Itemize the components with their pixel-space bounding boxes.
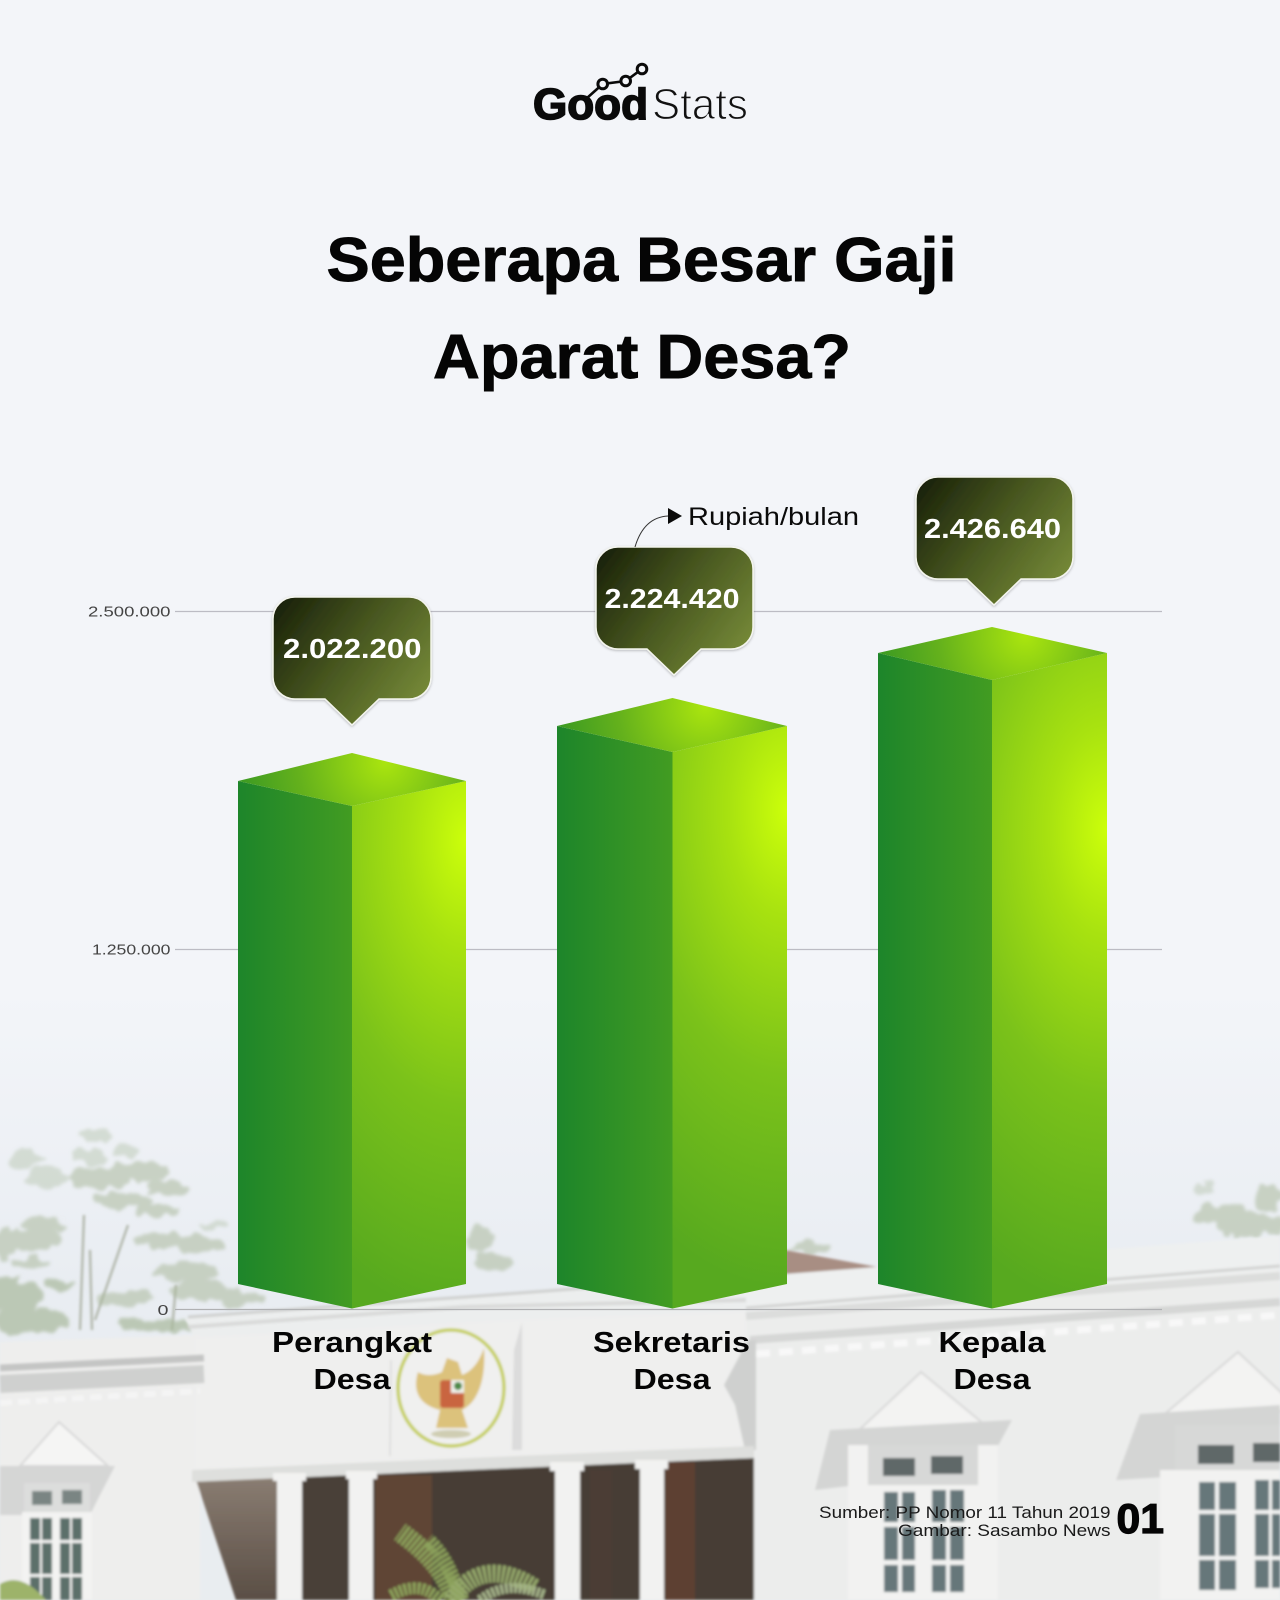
background photo: government building xyxy=(0,1236,1280,1600)
callout: 2.224.420: 2.224.420 xyxy=(604,583,740,614)
bottom-left palm xyxy=(0,1580,46,1600)
columns xyxy=(273,1460,668,1600)
wood panels xyxy=(375,1475,432,1600)
page number: 01 xyxy=(1116,1495,1164,1542)
central roof xyxy=(185,1282,746,1340)
wall seams and shadow xyxy=(512,1322,522,1450)
title: Aparat Desa? xyxy=(433,323,851,392)
source note xyxy=(819,1503,1110,1540)
callout: 2.224.420 xyxy=(596,547,753,675)
category label: Kepala Desa xyxy=(938,1327,1046,1396)
right-centre window xyxy=(857,1372,985,1432)
background photo: trees xyxy=(0,1129,1280,1334)
axis label 0: 0 xyxy=(158,1303,168,1319)
central wall xyxy=(195,1312,746,1470)
category label: Perangkat Desa: Desa xyxy=(314,1364,391,1396)
emblem xyxy=(398,1330,504,1446)
cornice xyxy=(0,1266,1280,1403)
arrow xyxy=(635,508,682,547)
source note: Gambar: Sasambo News xyxy=(898,1521,1110,1540)
portico beam xyxy=(192,1446,754,1482)
left window xyxy=(20,1422,108,1466)
category label: Perangkat Desa xyxy=(272,1327,432,1396)
portico dark xyxy=(196,1458,754,1600)
logo xyxy=(533,64,748,129)
category label: Sekretaris Desa: Sekretaris xyxy=(593,1327,750,1359)
title: Seberapa Besar Gaji xyxy=(326,226,956,295)
callout: 2.022.200: 2.022.200 xyxy=(283,633,422,664)
axis label 1.250.000: 1.250.000 xyxy=(92,942,170,958)
unit note: Rupiah/bulan with arrow xyxy=(635,503,859,547)
logo chart mark xyxy=(587,64,647,98)
background photo: tree trunks xyxy=(80,1215,176,1330)
main roof right xyxy=(640,1236,1280,1320)
category label: Kepala Desa: Kepala xyxy=(938,1327,1046,1359)
callout: 2.022.200 xyxy=(273,597,431,725)
portico left panel xyxy=(196,1476,280,1600)
logo word Stats: Stats xyxy=(652,80,748,129)
callout: 2.426.640: 2.426.640 xyxy=(924,513,1061,544)
category label: Perangkat Desa: Perangkat xyxy=(272,1327,432,1359)
source note: Sumber: PP Nomor 11 Tahun 2019 xyxy=(819,1503,1110,1522)
title xyxy=(326,226,956,392)
chart gridlines and axis xyxy=(88,604,1162,1319)
axis label 2.500.000: 2.500.000 xyxy=(88,604,170,620)
bar: Perangkat Desa xyxy=(238,753,466,1308)
callout: 2.426.640 xyxy=(916,477,1073,605)
right wing wall xyxy=(746,1270,1280,1600)
bar: Sekretaris Desa xyxy=(557,698,787,1308)
category label: Sekretaris Desa: Desa xyxy=(634,1364,711,1396)
category label: Kepala Desa: Desa xyxy=(954,1364,1031,1396)
palm plant xyxy=(390,1532,545,1600)
category label: Sekretaris Desa xyxy=(593,1327,750,1396)
left wing wall xyxy=(0,1335,200,1600)
bar: Kepala Desa xyxy=(878,627,1107,1308)
logo word Good: Good xyxy=(533,80,648,129)
unit note: Rupiah/bulan with arrow: Rupiah/bulan xyxy=(688,503,859,531)
roof xyxy=(785,1250,900,1285)
right window xyxy=(1160,1352,1280,1418)
